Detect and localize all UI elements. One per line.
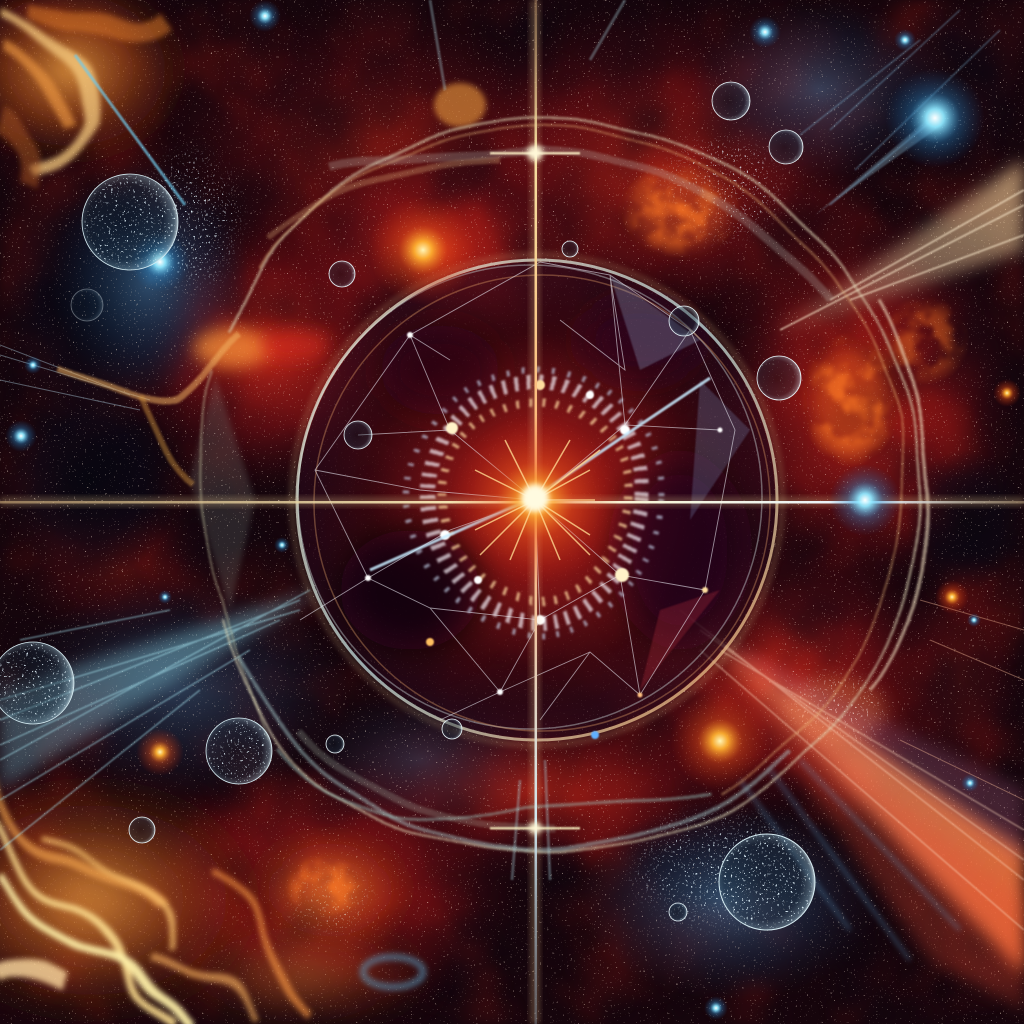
small bubbles bbox=[71, 82, 803, 921]
sparkling dust clouds bbox=[130, 130, 895, 940]
central sphere bbox=[292, 255, 782, 745]
inner star ring bbox=[410, 370, 660, 630]
diagonal blue streak bbox=[370, 378, 710, 570]
fabric: left veil bbox=[60, 330, 270, 740]
crosshair flares bbox=[490, 145, 580, 834]
bubbles bbox=[0, 82, 815, 930]
node sparkles bbox=[365, 332, 722, 739]
fire swirl: top left bbox=[0, 0, 195, 190]
bubble large left bbox=[82, 174, 178, 270]
sphere fill bbox=[299, 262, 775, 738]
beams: upper right blue bbox=[800, 10, 1000, 215]
bubble lower right bbox=[719, 834, 815, 930]
beams: lower right orange bbox=[680, 600, 1024, 1010]
large outer arcs bbox=[225, 118, 929, 852]
glass facets bbox=[610, 275, 750, 690]
nebula: bright bursts bbox=[194, 83, 970, 917]
beams: lower left blue bbox=[0, 590, 320, 850]
network lines bbox=[300, 262, 735, 720]
beams: left thin rays bbox=[0, 345, 150, 410]
dark voids bbox=[340, 300, 740, 650]
sphere rings bbox=[297, 260, 777, 740]
fire swirl: bottom left bbox=[0, 770, 440, 1024]
beam: blue top left bbox=[75, 55, 185, 205]
beams: upper right peach bbox=[770, 160, 1024, 335]
bubble far left bbox=[0, 642, 74, 724]
central starburst bbox=[450, 415, 620, 585]
bubble lower left bbox=[206, 718, 272, 784]
